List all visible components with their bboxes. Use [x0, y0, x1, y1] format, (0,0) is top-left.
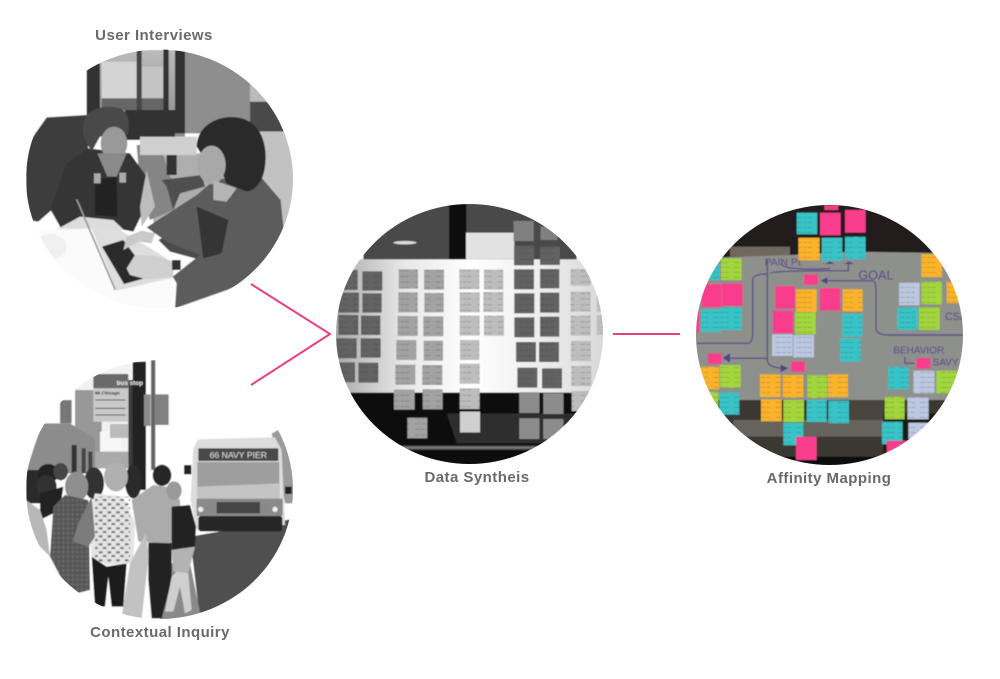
bus [191, 437, 285, 530]
label: user interviews: User Interviews [95, 27, 213, 44]
tree [271, 430, 293, 504]
upper wall [363, 203, 577, 260]
label: data syntheis: Data Syntheis [424, 469, 530, 486]
lavender stickies [772, 283, 935, 439]
sticky notes mid columns [393, 268, 564, 440]
road and sidewalk [192, 518, 290, 613]
woman left [51, 148, 147, 232]
girl with backpack [166, 481, 182, 500]
photo: affinity mapping: CSA [945, 311, 968, 323]
photo: affinity mapping: GOAL [858, 268, 894, 282]
woman in floral top [92, 557, 127, 607]
pink stickies [696, 205, 930, 460]
label: affinity mapping: Affinity Mapping [767, 470, 891, 487]
photo: affinity mapping: SAVY [933, 358, 959, 369]
photo: affinity mapping [696, 205, 963, 465]
railing [122, 533, 149, 618]
area below board [718, 400, 944, 458]
orange stickies [700, 238, 958, 421]
woman right [147, 176, 284, 308]
sticky notes light columns [459, 269, 603, 432]
bright wall [333, 259, 607, 393]
photo: affinity mapping: PAIN Pt. [765, 257, 804, 268]
photo: contextual inquiry: 66 NAVY PIER [210, 450, 267, 460]
arrow: interviews and inquiry merge into synthesis [251, 284, 330, 385]
photo: user interviews [26, 50, 293, 308]
photo: data synthesis [336, 204, 603, 464]
whiteboard [690, 252, 970, 400]
street furniture [128, 380, 133, 470]
photo: contextual inquiry: 66 Chicago [95, 391, 120, 396]
photo: contextual inquiry: bus stop [117, 380, 143, 387]
laptop [92, 228, 174, 291]
sticky notes dark columns [335, 246, 562, 388]
hands [123, 231, 155, 250]
arrow: synthesis to affinity mapping [613, 333, 680, 335]
label: contextual inquiry: Contextual Inquiry [90, 624, 230, 641]
photo: contextual inquiry [26, 360, 293, 619]
board handwriting and arrows [697, 260, 963, 368]
crowd [26, 470, 41, 504]
green stickies [710, 258, 957, 422]
teal stickies [701, 213, 918, 445]
photo: affinity mapping: BEHAVIOR [893, 345, 944, 356]
man [148, 543, 172, 618]
floor [350, 392, 578, 464]
table [59, 228, 94, 234]
